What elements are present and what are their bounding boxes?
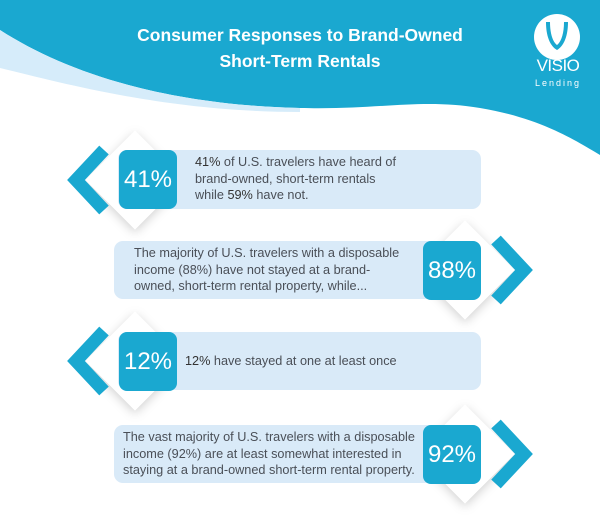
row 3: 12% have stayed at one at least once xyxy=(185,354,397,368)
row 4 xyxy=(114,425,481,484)
row 2: income (88%) have not stayed at a brand- xyxy=(134,262,370,276)
row 4: The vast majority of U.S. travelers with a disposable xyxy=(123,430,415,444)
row 1: 41% xyxy=(124,166,172,192)
row 4: staying at a brand-owned short-term rental property. xyxy=(123,463,415,477)
logo: VISIO xyxy=(537,56,579,75)
row 1: while 59% have not. xyxy=(195,188,309,202)
row 2 xyxy=(114,241,481,300)
title: Short-Term Rentals xyxy=(219,51,381,71)
logo xyxy=(534,14,581,88)
row 2: The majority of U.S. travelers with a disposable xyxy=(134,246,399,260)
row 2: owned, short-term rental property, while... xyxy=(134,279,367,293)
row 2: 88% xyxy=(428,256,476,284)
row 1 xyxy=(118,150,481,209)
row 3 xyxy=(118,332,481,391)
diamonds xyxy=(86,131,514,503)
chevrons xyxy=(76,150,524,484)
row 4: 92% xyxy=(428,440,476,468)
row 4: income (92%) are at least somewhat interested in xyxy=(123,446,402,460)
row 1: brand-owned, short-term rentals xyxy=(195,172,376,186)
title xyxy=(137,25,463,71)
title: Consumer Responses to Brand-Owned xyxy=(137,25,463,45)
row 1: 41% of U.S. travelers have heard of xyxy=(195,155,396,169)
row 3: 12% xyxy=(124,348,172,374)
logo: Lending xyxy=(535,78,581,88)
